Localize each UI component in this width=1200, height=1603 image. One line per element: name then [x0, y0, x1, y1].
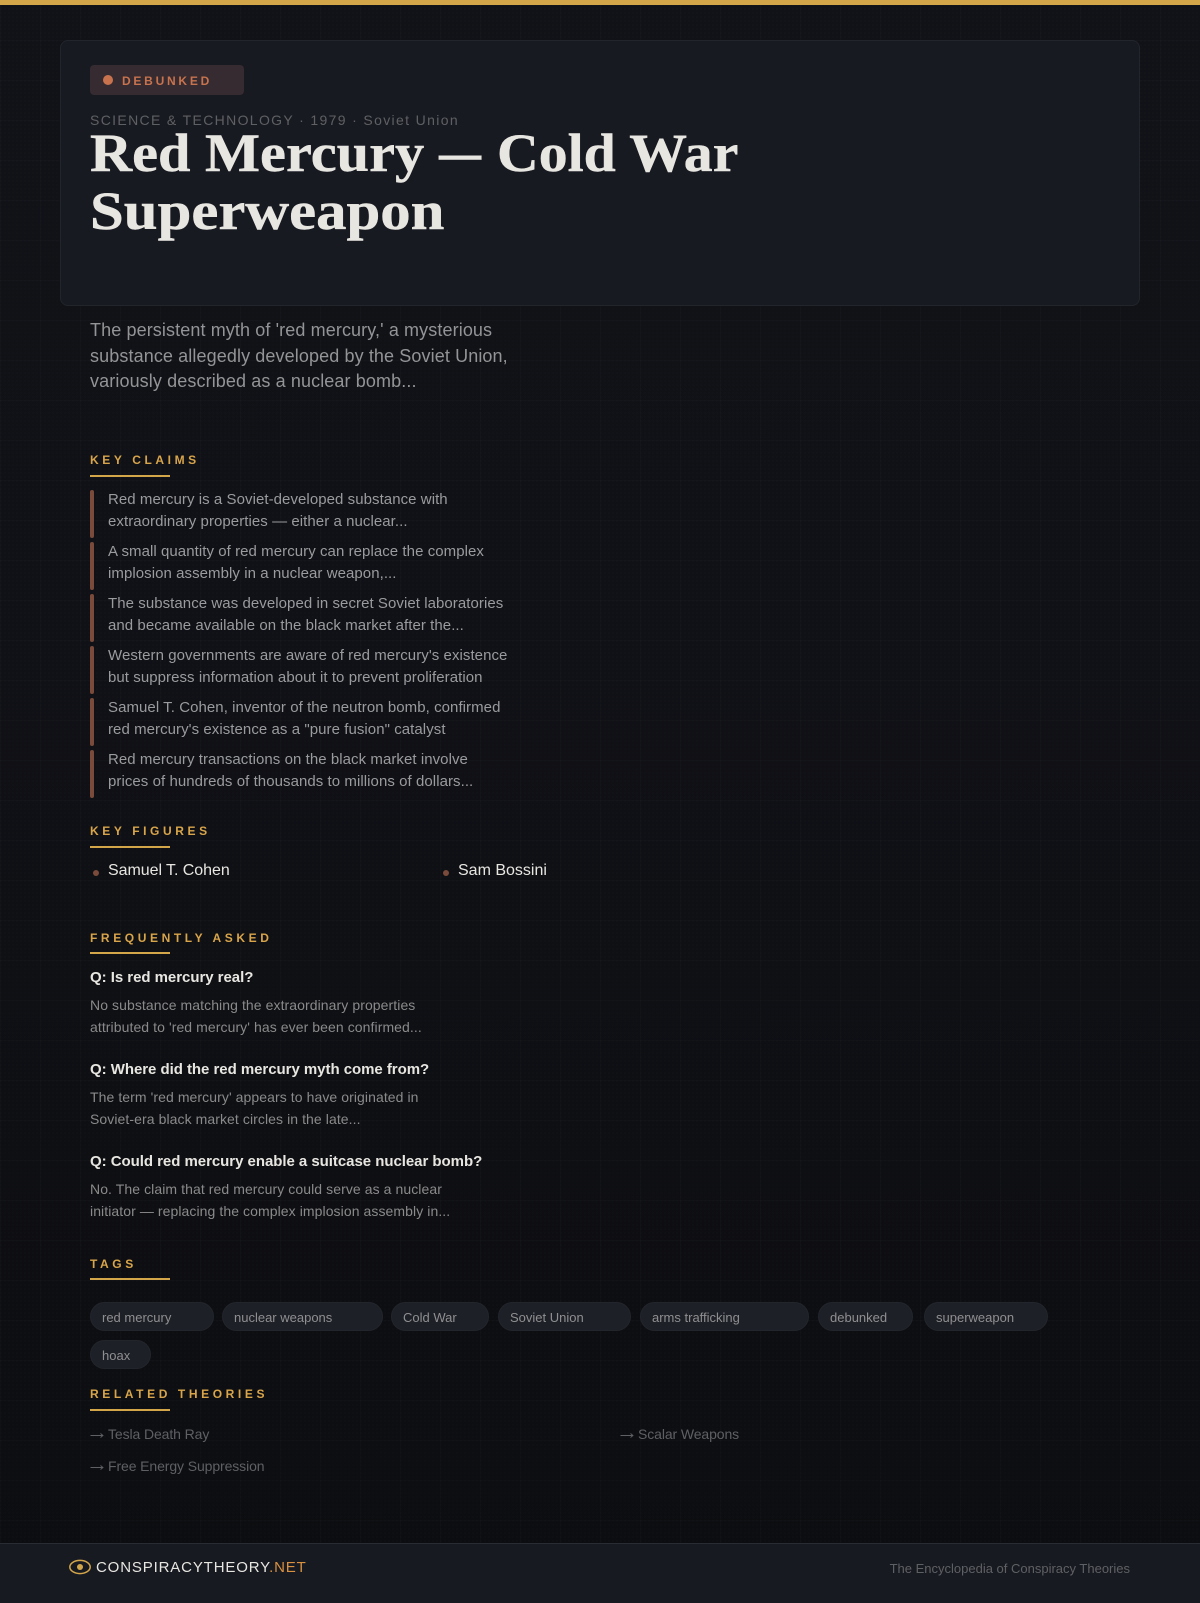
- tag: [498, 1302, 631, 1331]
- badge dot: [103, 75, 113, 85]
- claim 4: Western governments are aware of red mercury's existence: [108, 647, 507, 664]
- faq 2 answer: [90, 1089, 419, 1127]
- tag: [90, 1302, 214, 1331]
- heading: related theories: RELATED THEORIES: [90, 1387, 268, 1401]
- claims list: [90, 490, 507, 798]
- faq 3 question: Q: Could red mercury enable a suitcase nuclear bomb?: [90, 1153, 482, 1170]
- claim 1: Red mercury is a Soviet-developed substance with: [108, 491, 448, 508]
- claim 6: Red mercury transactions on the black market involve: [108, 751, 468, 768]
- title: —: [439, 122, 481, 182]
- heading: frequently asked: FREQUENTLY ASKED: [90, 931, 273, 945]
- tag: Soviet Union: [510, 1310, 584, 1325]
- tag: [222, 1302, 383, 1331]
- lede text: The persistent myth of 'red mercury,' a mysterious: [90, 320, 492, 340]
- claim 2: A small quantity of red mercury can replace the complex: [108, 543, 484, 560]
- claim 4: but suppress information about it to prevent proliferation: [108, 669, 483, 686]
- faq 2 answer: Soviet-era black market circles in the late...: [90, 1111, 361, 1127]
- tag: debunked: [830, 1310, 887, 1325]
- title: Red Mercury: [90, 123, 424, 183]
- tag: red mercury: [102, 1310, 171, 1325]
- faq 3 answer: [90, 1181, 450, 1219]
- title: Cold War: [497, 123, 738, 183]
- claim 3: and became available on the black market after the...: [108, 617, 464, 634]
- claim 6: [90, 750, 473, 798]
- header panel: [60, 40, 1140, 306]
- footer: [0, 1543, 1200, 1603]
- related: Scalar Weapons: Scalar Weapons: [638, 1426, 739, 1442]
- tag: [90, 1340, 151, 1369]
- title: Superweapon: [90, 181, 444, 241]
- faq 3 answer: No. The claim that red mercury could serve as a nuclear: [90, 1181, 442, 1197]
- tag: [640, 1302, 809, 1331]
- related: Tesla Death Ray: Tesla Death Ray: [108, 1426, 209, 1442]
- claim 6: prices of hundreds of thousands to millions of dollars...: [108, 773, 473, 790]
- faq 1 answer: [90, 997, 422, 1035]
- faq 1 answer: No substance matching the extraordinary properties: [90, 997, 415, 1013]
- title: [90, 122, 738, 241]
- claim 3: The substance was developed in secret Soviet laboratories: [108, 595, 503, 612]
- tag: [818, 1302, 913, 1331]
- claim 1: [90, 490, 448, 538]
- badge label: DEBUNKED: [122, 74, 212, 88]
- tag: nuclear weapons: [234, 1310, 332, 1325]
- footer tagline: The Encyclopedia of Conspiracy Theories: [890, 1561, 1130, 1576]
- claim 2: [90, 542, 484, 590]
- related: Free Energy Suppression: Free Energy Suppression: [108, 1458, 264, 1474]
- tag list: [90, 1302, 1048, 1369]
- faq 3 answer: initiator — replacing the complex implosion assembly in...: [90, 1203, 450, 1219]
- claim 5: Samuel T. Cohen, inventor of the neutron bomb, confirmed: [108, 699, 500, 716]
- tag: arms trafficking: [652, 1310, 740, 1325]
- claim 4: [90, 646, 507, 694]
- icon: eye logo: [69, 1560, 91, 1574]
- faq 2 answer: The term 'red mercury' appears to have originated in: [90, 1089, 419, 1105]
- tag: hoax: [102, 1348, 130, 1363]
- tag: [391, 1302, 489, 1331]
- tag: superweapon: [936, 1310, 1014, 1325]
- faq 2 question: Q: Where did the red mercury myth come from?: [90, 1061, 429, 1078]
- heading: key figures: KEY FIGURES: [90, 824, 211, 838]
- heading: key claims: KEY CLAIMS: [90, 453, 200, 467]
- status badge: debunked: [90, 65, 244, 95]
- claim 2: implosion assembly in a nuclear weapon,...: [108, 565, 397, 582]
- claim 5: [90, 698, 500, 746]
- lede text: [90, 320, 508, 391]
- faq 1 question: Q: Is red mercury real?: [90, 969, 253, 986]
- logo wordmark: CONSPIRACYTHEORY.NET: [96, 1559, 307, 1576]
- heading: tags: TAGS: [90, 1257, 137, 1271]
- category meta line: SCIENCE & TECHNOLOGY · 1979 · Soviet Union: [90, 112, 459, 128]
- figure: Samuel T. Cohen: Samuel T. Cohen: [108, 862, 230, 879]
- lede text: substance allegedly developed by the Soviet Union,: [90, 346, 508, 366]
- lede text: variously described as a nuclear bomb...: [90, 371, 417, 391]
- faq 1 answer: attributed to 'red mercury' has ever been confirmed...: [90, 1019, 422, 1035]
- top accent bar: [0, 0, 1200, 5]
- tag: [924, 1302, 1048, 1331]
- claim 3: [90, 594, 503, 642]
- claim 1: extraordinary properties — either a nuclear...: [108, 513, 408, 530]
- tag: Cold War: [403, 1310, 457, 1325]
- figure: Sam Bossini: Sam Bossini: [458, 862, 547, 879]
- claim 5: red mercury's existence as a "pure fusion" catalyst: [108, 721, 446, 738]
